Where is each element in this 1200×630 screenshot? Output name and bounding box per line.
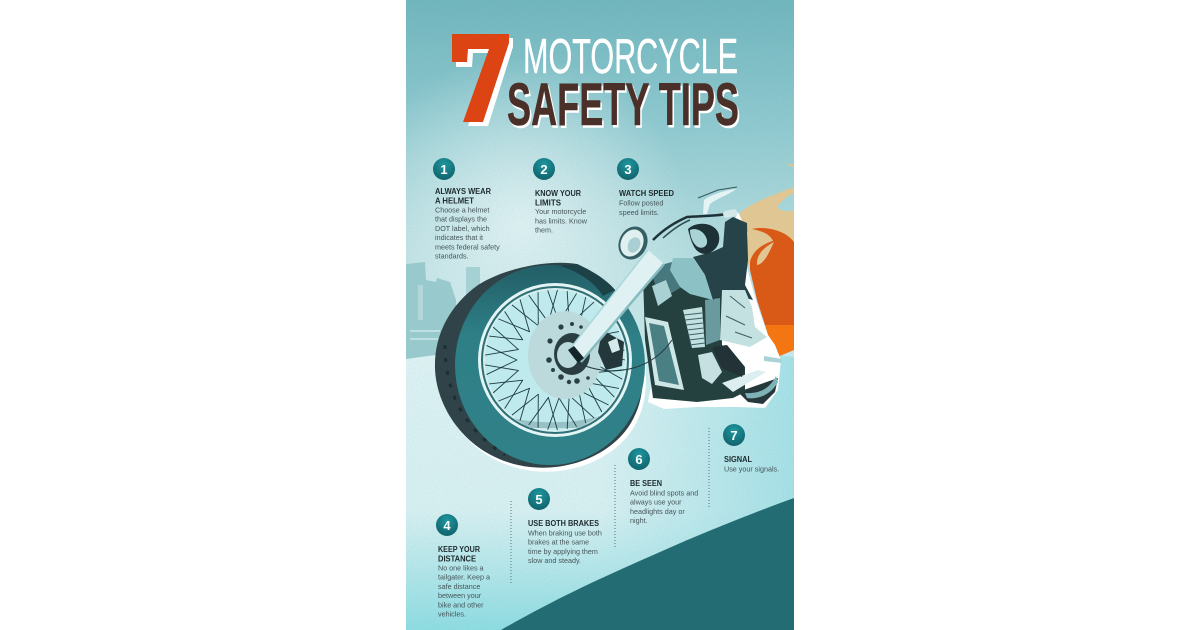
- dark teal hill: [501, 498, 794, 630]
- tip 2 body: them.: [535, 226, 553, 235]
- trousers: [720, 290, 767, 347]
- orange flame: [750, 228, 794, 325]
- motorcycle: [435, 187, 782, 472]
- helmet: [688, 224, 719, 254]
- tip 4 heading: DISTANCE: [438, 553, 476, 563]
- heading line: safety tips: SAFETY TIPS: [508, 74, 740, 140]
- front tyre: [435, 263, 645, 468]
- title: [452, 30, 740, 140]
- rim and spokes: [478, 283, 632, 437]
- flames: [740, 163, 794, 358]
- handlebars and mirror: [653, 187, 738, 240]
- tip 1 body: meets federal safety: [435, 242, 500, 251]
- numeral seven: [452, 34, 513, 126]
- tip 1 body: DOT label, which: [435, 224, 490, 233]
- badge 4: 4: [443, 518, 451, 533]
- tip 4 body: No one likes a: [438, 564, 484, 572]
- skyline: [406, 262, 480, 359]
- tip 4 body: tailgater. Keep a: [438, 573, 490, 582]
- tip 1 body: Choose a helmet: [435, 206, 489, 214]
- tip 2: [533, 158, 588, 235]
- tip 2 body: Your motorcycle: [535, 207, 586, 216]
- tip 1 heading: ALWAYS WEAR: [435, 186, 492, 196]
- tip 1 heading: A HELMET: [435, 195, 475, 205]
- tip 1 body: standards.: [435, 252, 469, 260]
- tip 2 body: has limits. Know: [535, 216, 588, 225]
- tan flame: [740, 187, 794, 270]
- engine block: [643, 262, 782, 402]
- front fork: [568, 250, 664, 363]
- badge 3: 3: [624, 162, 632, 177]
- tip 4 body: between your: [438, 591, 482, 600]
- tip 3: [617, 158, 674, 217]
- tip 2 heading: [535, 188, 582, 207]
- tip 1 body: indicates that it: [435, 233, 483, 242]
- cylinder fins: [683, 307, 705, 348]
- tip 7 heading: SIGNAL: [724, 454, 752, 464]
- tip 6 heading: BE SEEN: [630, 478, 662, 488]
- tip 4 body: vehicles.: [438, 610, 466, 618]
- tip 5 body: When braking use both: [528, 528, 602, 538]
- tip 4 heading: [438, 544, 481, 563]
- badge 5: 5: [535, 492, 543, 507]
- tip 6: [628, 448, 698, 525]
- tip 5 heading: USE BOTH BRAKES: [528, 518, 599, 528]
- tip 6 body: headlights day or: [630, 507, 685, 516]
- tip 5 body: slow and steady.: [528, 556, 581, 565]
- tip 3 heading: WATCH SPEED: [619, 188, 674, 198]
- badge 7: 7: [730, 428, 738, 443]
- tip 4 body: safe distance: [438, 582, 480, 591]
- tip 7: [723, 424, 779, 474]
- tip 1: [433, 158, 500, 260]
- panel: poster background: [406, 0, 794, 630]
- brake disc: [528, 311, 602, 399]
- tip 3 body: Follow posted: [619, 198, 663, 208]
- radiator: [645, 317, 684, 390]
- rider: [688, 217, 767, 377]
- tip 3 body: speed limits.: [619, 208, 659, 217]
- gas tank: [670, 258, 713, 300]
- jacket and arm: [693, 217, 753, 300]
- tip 2 heading: KNOW YOUR: [535, 188, 582, 198]
- tip 6 body: night.: [630, 516, 648, 525]
- tip 5 body: time by applying them: [528, 547, 598, 556]
- tip 5 body: brakes at the same: [528, 538, 589, 547]
- flame curl: [757, 242, 774, 265]
- tip 2 heading: LIMITS: [535, 197, 561, 207]
- badge 2: 2: [540, 162, 548, 177]
- heading line: safety tips: SAFETY TIPS: [507, 71, 739, 138]
- cable: [578, 340, 672, 371]
- tip 4 body: bike and other: [438, 600, 484, 609]
- tip 1 body: that displays the: [435, 215, 487, 224]
- brake caliper: [598, 330, 624, 370]
- white cut-out outline: [438, 212, 781, 472]
- badge 6: 6: [635, 452, 643, 467]
- badge 1: 1: [440, 162, 448, 177]
- heading line: safety tips: [507, 71, 740, 140]
- tip 1 heading: [435, 186, 492, 205]
- tip 4: [436, 514, 490, 618]
- tip 7 body: Use your signals.: [724, 464, 779, 474]
- tip 5: [528, 488, 602, 565]
- heading line: motorcycle: MOTORCYCLE: [523, 30, 738, 84]
- boot: [712, 345, 745, 377]
- tip 6 body: Avoid blind spots and: [630, 488, 698, 498]
- tip 6 body: always use your: [630, 498, 682, 507]
- headlight: [613, 222, 653, 264]
- rear wheel: [738, 376, 778, 404]
- tip 4 heading: KEEP YOUR: [438, 544, 481, 554]
